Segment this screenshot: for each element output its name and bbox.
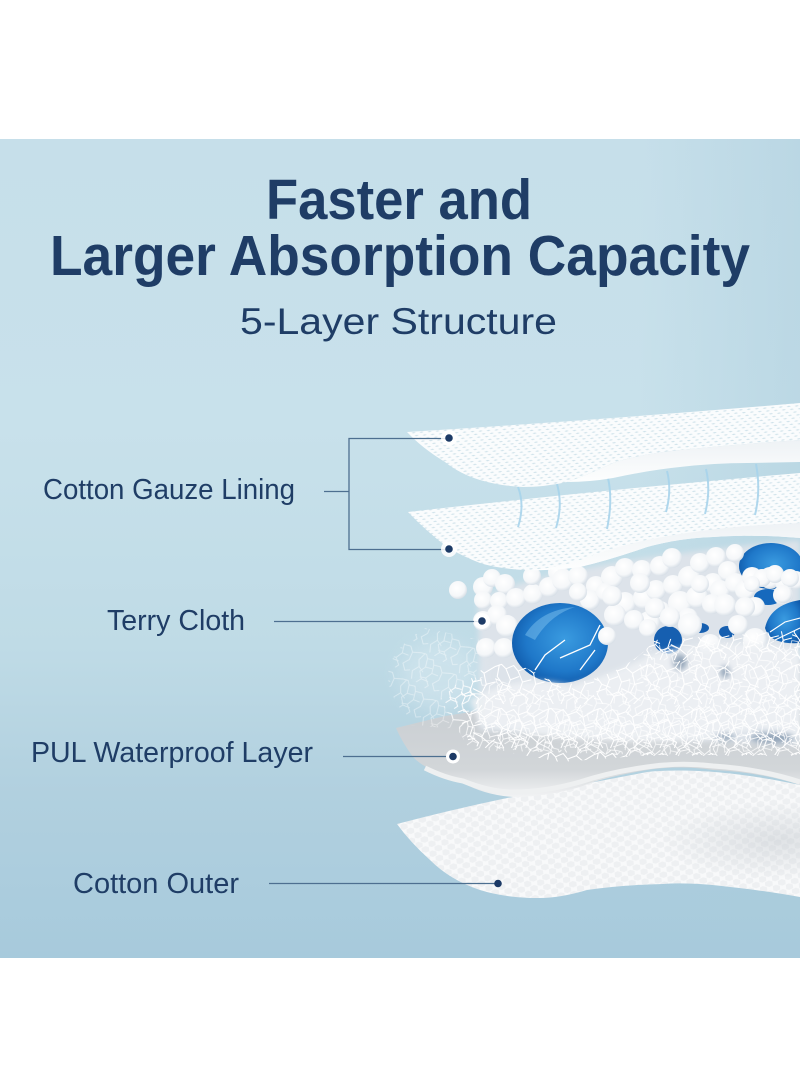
fibre mass: strands — [440, 630, 800, 762]
title: Larger Absorption Capacity — [50, 224, 750, 288]
leader: Cotton Outer — [269, 880, 502, 887]
illustration: layered diaper structure — [388, 403, 800, 898]
water wicking streaks — [518, 464, 758, 529]
layer: top gauze lining — [407, 403, 800, 487]
leader: Terry Cloth — [274, 613, 490, 629]
layer: second gauze lining — [408, 473, 800, 570]
label: Cotton Outer: Cotton Outer — [73, 868, 239, 900]
title: Faster and — [266, 168, 532, 232]
white bead on top of drop — [598, 627, 616, 645]
layer: cotton outer — [397, 771, 800, 898]
blue gel drops: middle — [654, 623, 735, 654]
label: Terry Cloth: Terry Cloth — [107, 605, 245, 637]
layer: PUL waterproof — [396, 660, 800, 797]
blue gel drop: small — [754, 589, 782, 605]
bracket leader: Cotton Gauze Lining — [324, 430, 457, 557]
title — [50, 168, 750, 288]
dark flecks in fibres — [673, 654, 794, 743]
label: Cotton Gauze Lining: Cotton Gauze Lining — [43, 474, 295, 506]
label: PUL Waterproof Layer: PUL Waterproof Layer — [31, 737, 313, 769]
background panel — [0, 139, 800, 958]
blue gel drop: large — [512, 603, 608, 683]
absorbent core shadow — [478, 540, 800, 745]
white absorbent beads — [449, 544, 800, 658]
PUL layer front edge — [425, 764, 800, 792]
subtitle: 5-Layer Structure — [240, 301, 557, 342]
fibre mass: left wispy strands — [388, 628, 480, 730]
fibre mass: soft body — [400, 641, 800, 742]
leader: PUL Waterproof Layer — [343, 750, 460, 764]
blue gel drop: top right — [739, 543, 800, 589]
blue gel drop: right — [765, 600, 800, 643]
top beads overlapping drop — [744, 565, 799, 603]
